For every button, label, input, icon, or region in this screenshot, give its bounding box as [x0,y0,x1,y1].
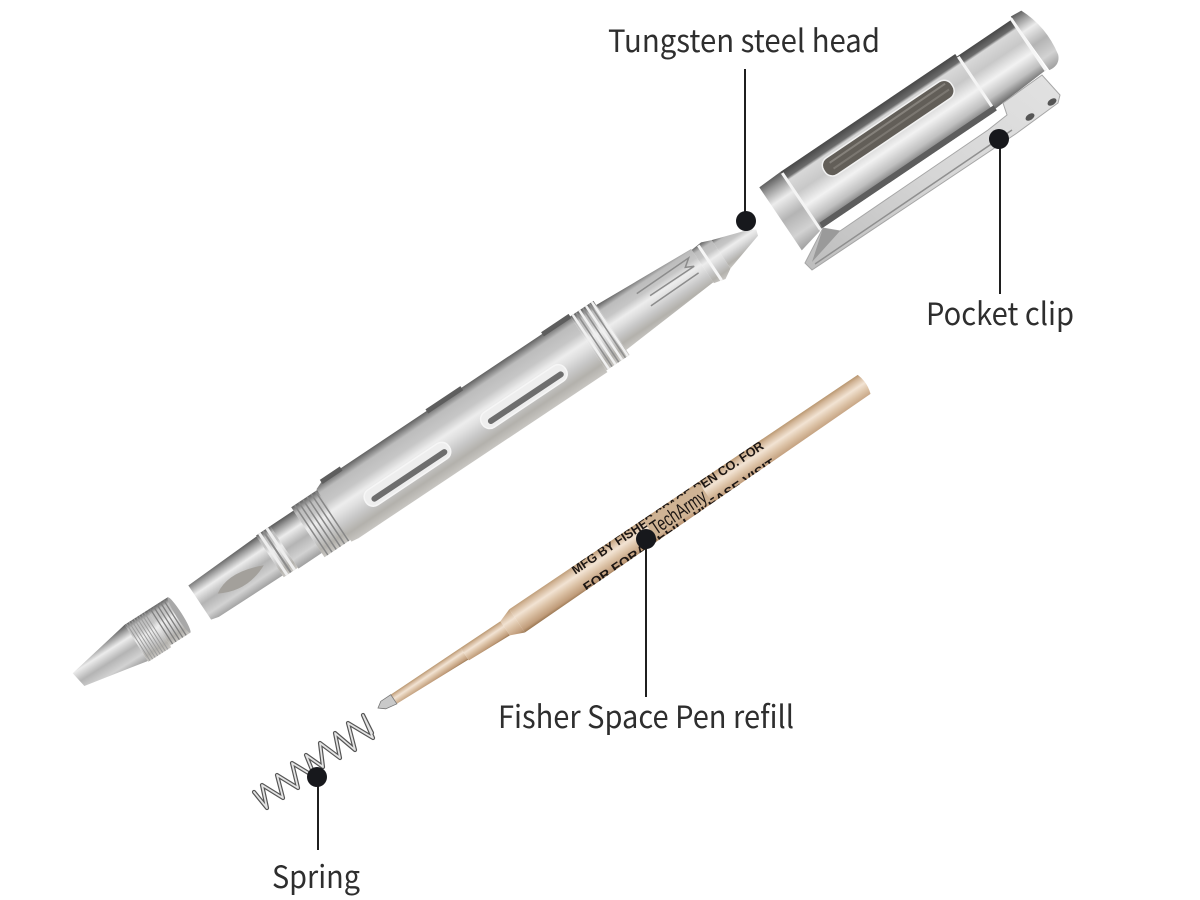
pocket clip [805,75,1060,270]
spring [254,715,373,808]
callout: Spring: Spring [272,852,360,897]
pen body [180,201,776,631]
refill printing: TechArmy [646,486,711,539]
callout: Spring [272,767,360,897]
body slots [361,439,454,510]
white gap between barrel and clip [840,114,1007,231]
callout: Fisher Space Pen refill [498,529,794,737]
cap barrel [759,5,1070,250]
cap with pocket clip [759,5,1070,270]
window slot [819,77,958,179]
refill printing: FOR FORA REFILL PLEASE VISIT [580,455,778,595]
refill printing: MFG BY FISHER SPACE PEN CO. FOR [569,438,767,577]
upper edge notches [320,467,343,484]
silver tip [376,695,397,714]
callout: Pocket clip: Pocket clip [926,289,1074,334]
callout: Pocket clip [926,129,1074,334]
callout: Fisher Space Pen refill: Fisher Space Pen refill [498,692,794,737]
end cone [66,596,194,699]
callout: Tungsten steel head: Tungsten steel head [608,16,880,61]
ink refill [371,371,878,727]
callout: Tungsten steel head [608,16,880,231]
